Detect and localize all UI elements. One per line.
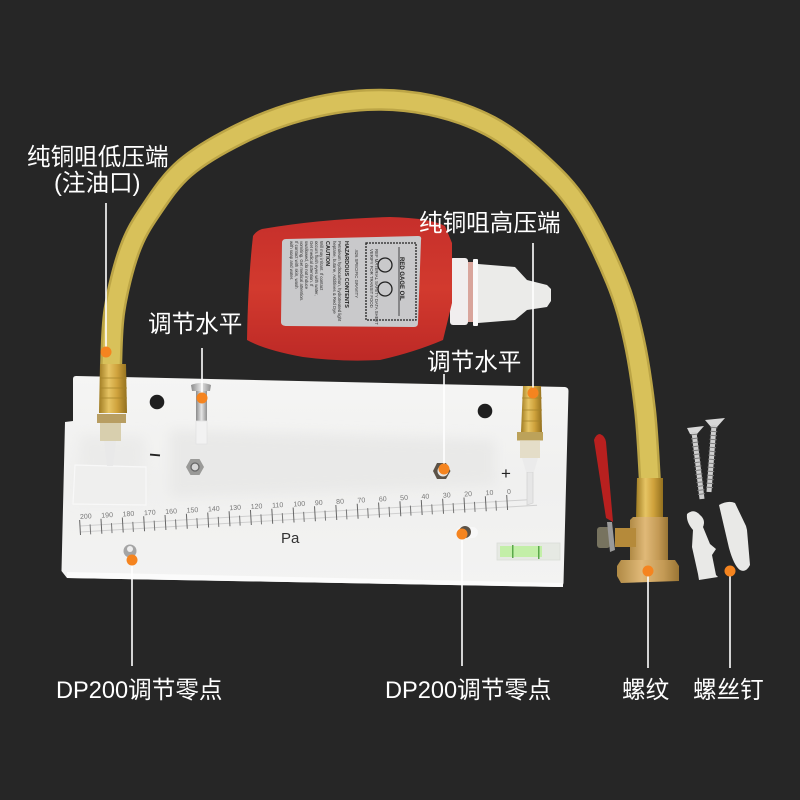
adjusting screw left (186, 383, 211, 475)
ruler scale: 180 (122, 511, 135, 518)
label: high pressure port: 纯铜咀高压端 (419, 210, 561, 237)
ruler scale: 130 (229, 505, 241, 512)
label: DP200 zero right: DP200调节零点 (385, 677, 552, 704)
bottle label: RED GAGE OIL (398, 257, 404, 301)
ruler scale: 0 (507, 489, 511, 496)
valve body (630, 517, 668, 560)
leader line: screws (729, 571, 731, 668)
label: adjust level right: 调节水平 (427, 349, 521, 376)
plastic wall anchors (687, 502, 750, 580)
ruler scale: 40 (421, 494, 430, 501)
bottle label: swallowed, do not induce (304, 241, 309, 290)
bottle label: HAZARDOUS CONTENTS (343, 241, 349, 308)
ruler scale: 170 (144, 510, 156, 517)
right brass fitting (517, 386, 543, 472)
ruler scale: 80 (336, 499, 344, 506)
glass capillary right end (527, 472, 533, 505)
ruler scale: 200 (80, 513, 92, 521)
valve handle (594, 434, 613, 522)
bottle nozzle cap (450, 258, 551, 326)
plus sign: + (501, 464, 511, 483)
leader line: high pressure port (532, 243, 534, 393)
ruler scale: 190 (101, 512, 113, 520)
leader line: zero left (131, 560, 133, 666)
bottle label: If contact with skin, wash (294, 241, 299, 289)
label: DP200 zero left: DP200调节零点 (56, 677, 223, 704)
adjusting nut right (433, 463, 450, 479)
bottle label (281, 236, 421, 327)
bottle label: with soap and water. (289, 241, 294, 280)
label: low pressure port: (注油口) (54, 170, 140, 197)
ruler scale: 20 (464, 491, 472, 498)
bottle label: heptane, butane, Additives & Red Dye (332, 241, 337, 314)
ruler scale: 10 (485, 490, 494, 497)
valve screw (597, 527, 610, 548)
latex tube (111, 100, 650, 482)
zero screw right (456, 526, 478, 538)
bottle label: occurs flush eyes with water, (314, 241, 319, 296)
leader line: adjust level right (443, 374, 445, 469)
bottle label: CAUTION (324, 241, 330, 266)
bottle label: vomiting. Get medical attention. (299, 241, 304, 301)
bottle label: VERIFY FOR TRANSIT FOOD (369, 249, 374, 308)
bottle label: Get medical attention. If (309, 241, 314, 287)
bottle label: Petroleum hydrocarbon, hydrotreated light (337, 241, 342, 322)
ruler scale: 60 (379, 496, 387, 503)
ball valve (594, 434, 679, 583)
label: screws: 螺丝钉 (693, 677, 764, 704)
left brass fitting (97, 364, 127, 466)
ruler scale: 50 (400, 495, 408, 502)
label: low pressure port (27, 144, 169, 197)
leader line: adjust level left (201, 348, 203, 398)
screws (687, 418, 725, 499)
valve stem (615, 528, 636, 547)
ruler scale: 160 (165, 508, 177, 516)
ruler scale: 90 (315, 500, 323, 507)
leader line: zero right (461, 534, 463, 666)
ruler scale: 30 (443, 492, 451, 500)
red gage oil bottle (247, 217, 551, 361)
bottle label: .826 SPECIFIC GRAVITY (354, 249, 359, 298)
leader line: low pressure port (105, 203, 107, 352)
label: low pressure port: 纯铜咀低压端 (27, 144, 169, 171)
valve bracket (607, 522, 615, 552)
unit label: Pa: Pa (281, 530, 300, 547)
ruler scale: 110 (272, 502, 284, 510)
ruler scale (79, 487, 537, 532)
zero screw left (124, 544, 136, 558)
mounting holes (150, 395, 492, 418)
hex nut (617, 560, 679, 583)
ruler scale: 140 (208, 506, 220, 513)
leader line: thread (647, 571, 649, 668)
ruler scale: 120 (251, 503, 263, 511)
label: adjust level left: 调节水平 (148, 311, 242, 338)
bottle label: REF MATERIAL SAFETY DATA SHEET (374, 249, 379, 325)
minus sign (150, 454, 160, 456)
panel: acrylic gauge plate (62, 376, 568, 587)
spirit level (497, 543, 560, 560)
ruler scale: 100 (293, 501, 305, 508)
orange marker dots (100, 346, 736, 576)
ruler scale: 70 (357, 497, 366, 505)
label: thread: 螺纹 (622, 677, 670, 704)
ruler scale: 150 (186, 507, 199, 515)
valve barb (636, 478, 663, 518)
bottle label: Will may irritant. If contact (319, 241, 324, 291)
